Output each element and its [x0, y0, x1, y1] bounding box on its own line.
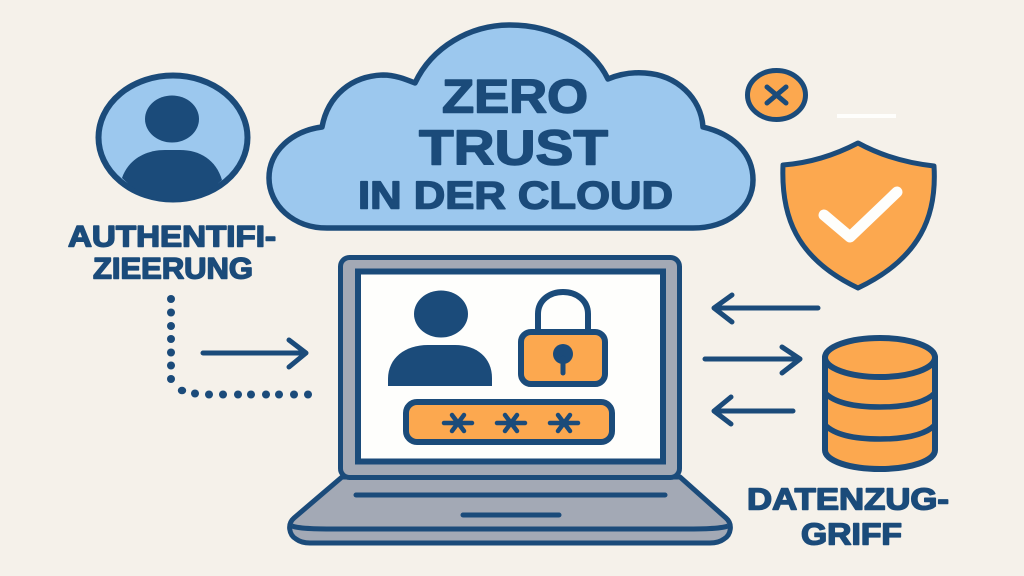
- label: authentifizierung: AUTHENTIFI-: [68, 220, 276, 254]
- label: datenzugriff: DATENZUG-: [747, 482, 949, 516]
- arrow: to laptop: [203, 340, 306, 367]
- dotted connector: [167, 295, 312, 398]
- cloud with title: [269, 25, 753, 228]
- icon: user avatar: [98, 76, 248, 201]
- cloud shape: [269, 25, 753, 228]
- laptop lid: [340, 258, 680, 478]
- icon: shield with check: [783, 143, 934, 288]
- label: authentifizierung: [68, 220, 276, 286]
- white dash: [837, 114, 896, 118]
- arrow: from database: [714, 397, 793, 424]
- title: trust: TRUST: [419, 122, 608, 176]
- icon: padlock: [521, 292, 605, 384]
- icon: screen user: [388, 290, 492, 386]
- icon: database: [825, 338, 935, 469]
- label: datenzugriff: GRIFF: [801, 516, 902, 552]
- laptop: [290, 258, 730, 543]
- icon: x badge: [748, 70, 806, 120]
- laptop screen: [358, 272, 663, 462]
- laptop base: [290, 477, 730, 543]
- password field: [406, 402, 612, 442]
- title: in der cloud: IN DER CLOUD: [358, 174, 673, 218]
- label: datenzugriff: [747, 482, 949, 552]
- title: zero: ZERO: [442, 70, 588, 122]
- label: authentifizierung: ZIEERUNG: [93, 252, 253, 286]
- arrow: to database: [705, 347, 800, 373]
- arrow: from server top: [714, 295, 818, 322]
